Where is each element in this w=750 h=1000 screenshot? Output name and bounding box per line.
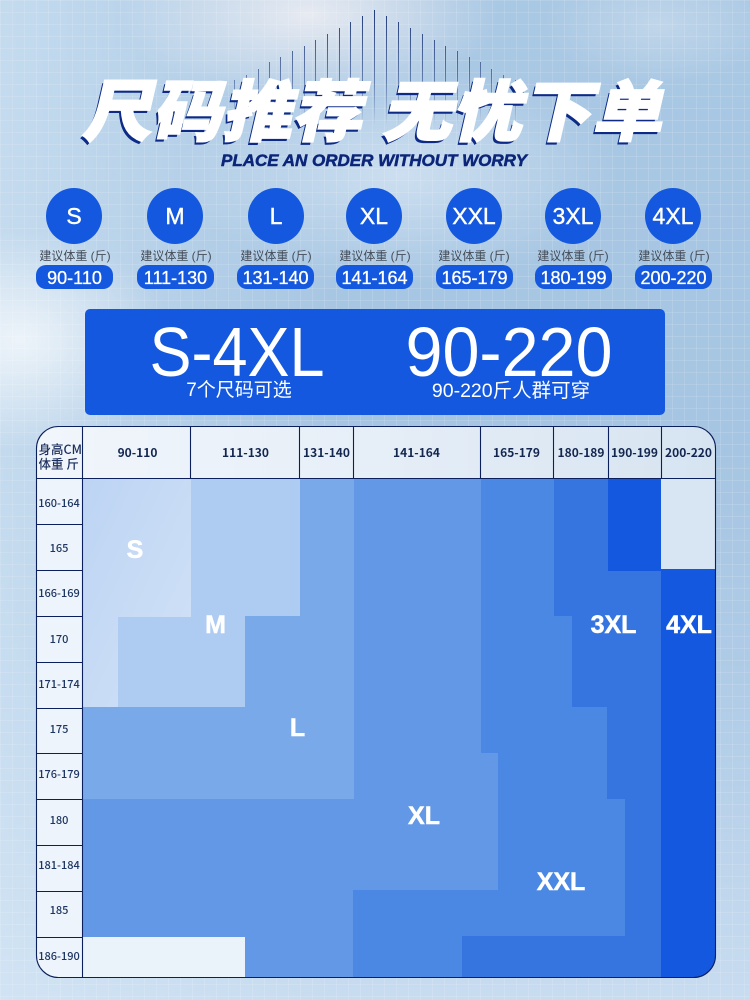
size badge 3XL: 3XL [553, 203, 593, 229]
title: 尺码推荐 无忧下单 [77, 60, 679, 155]
zone labels: S [127, 536, 143, 564]
weight note 4XL: 建议体重 (斤) [638, 249, 710, 263]
weight column headers: 131-140 [303, 444, 350, 461]
size badge XXL: XXL [452, 203, 496, 229]
zone labels: 3XL [591, 611, 636, 639]
height row headers: 160-164 [38, 495, 80, 511]
weight note L: 建议体重 (斤) [240, 249, 312, 263]
height row headers: 181-184 [38, 857, 80, 873]
weight note XL: 建议体重 (斤) [339, 249, 411, 263]
weight range S: 90-110 [47, 268, 102, 288]
weight column headers: 180-189 [558, 444, 604, 461]
weight range 3XL: 180-199 [540, 268, 607, 288]
weight column headers: 190-199 [611, 444, 658, 461]
weight range XL: 141-164 [341, 268, 408, 288]
size badge S [46, 188, 102, 244]
size badge L [248, 188, 304, 244]
corner header [38, 439, 82, 472]
zone: L [82, 478, 354, 799]
weight note S: 建议体重 (斤) [39, 249, 111, 263]
size badge L: L [270, 203, 282, 229]
height row headers: 165 [50, 540, 68, 556]
size badge XL: XL [360, 203, 388, 229]
weight column headers: 111-130 [222, 444, 269, 461]
weight column headers: 90-110 [118, 444, 157, 461]
height row headers: 166-169 [38, 585, 80, 601]
size badge 4XL [645, 188, 701, 244]
weight range headline: 90-220 [405, 313, 613, 391]
size badge XL [346, 188, 402, 244]
subtitle: PLACE AN ORDER WITHOUT WORRY [221, 151, 527, 170]
zone: 3XL [462, 478, 661, 978]
zone labels: L [290, 714, 305, 742]
height row headers [38, 495, 80, 964]
zone labels: M [205, 611, 226, 639]
weight range S [36, 265, 113, 289]
size range caption: 7个尺码可选 [186, 380, 292, 401]
weight range M [137, 265, 214, 289]
zone: unavailable bottom left [82, 937, 245, 978]
corner header: 身高CM [38, 439, 82, 458]
height row headers: 180 [50, 812, 68, 828]
weight note 3XL: 建议体重 (斤) [537, 249, 609, 263]
zone: 4XL [608, 478, 716, 978]
height row headers: 185 [50, 902, 68, 918]
zone: M [118, 478, 300, 707]
header and height column background [36, 426, 716, 978]
decorative spike lines [234, 10, 516, 121]
size badge XXL [446, 188, 502, 244]
weight column headers: 165-179 [493, 444, 540, 461]
zone labels: XL [408, 802, 440, 830]
height row headers: 171-174 [38, 676, 80, 692]
zone: S [82, 478, 191, 707]
height row headers: 170 [50, 631, 68, 647]
weight range XXL: 165-179 [441, 268, 508, 288]
size badge S: S [66, 203, 82, 229]
weight range M: 111-130 [144, 268, 207, 288]
weight column headers: 200-220 [665, 444, 712, 461]
table lines [36, 426, 716, 978]
weight range L: 131-140 [242, 268, 309, 288]
size badge M [147, 188, 203, 244]
weight column headers [118, 444, 712, 461]
height row headers: 176-179 [38, 766, 80, 782]
size badge 3XL [545, 188, 601, 244]
weight note M: 建议体重 (斤) [140, 249, 212, 263]
size range headline: S-4XL [149, 313, 325, 391]
size selector row [36, 188, 712, 289]
height row headers: 175 [50, 721, 68, 737]
4XL empty corner [661, 478, 716, 569]
weight note XXL: 建议体重 (斤) [438, 249, 510, 263]
weight range caption: 90-220斤人群可穿 [432, 380, 590, 402]
table outline [36, 426, 716, 978]
summary banner [85, 309, 665, 415]
zone labels [127, 536, 712, 896]
zone labels: 4XL [666, 611, 712, 639]
size badge M: M [165, 203, 185, 229]
weight column headers: 141-164 [393, 444, 440, 461]
weight range 4XL: 200-220 [640, 268, 707, 288]
zone: XL [82, 478, 498, 978]
height row headers: 186-190 [38, 948, 80, 964]
zone labels: XXL [537, 868, 585, 896]
corner header: 体重 斤 [38, 454, 79, 472]
size badge 4XL: 4XL [653, 203, 693, 229]
size chart table [36, 426, 716, 978]
zone: XXL [353, 478, 625, 978]
